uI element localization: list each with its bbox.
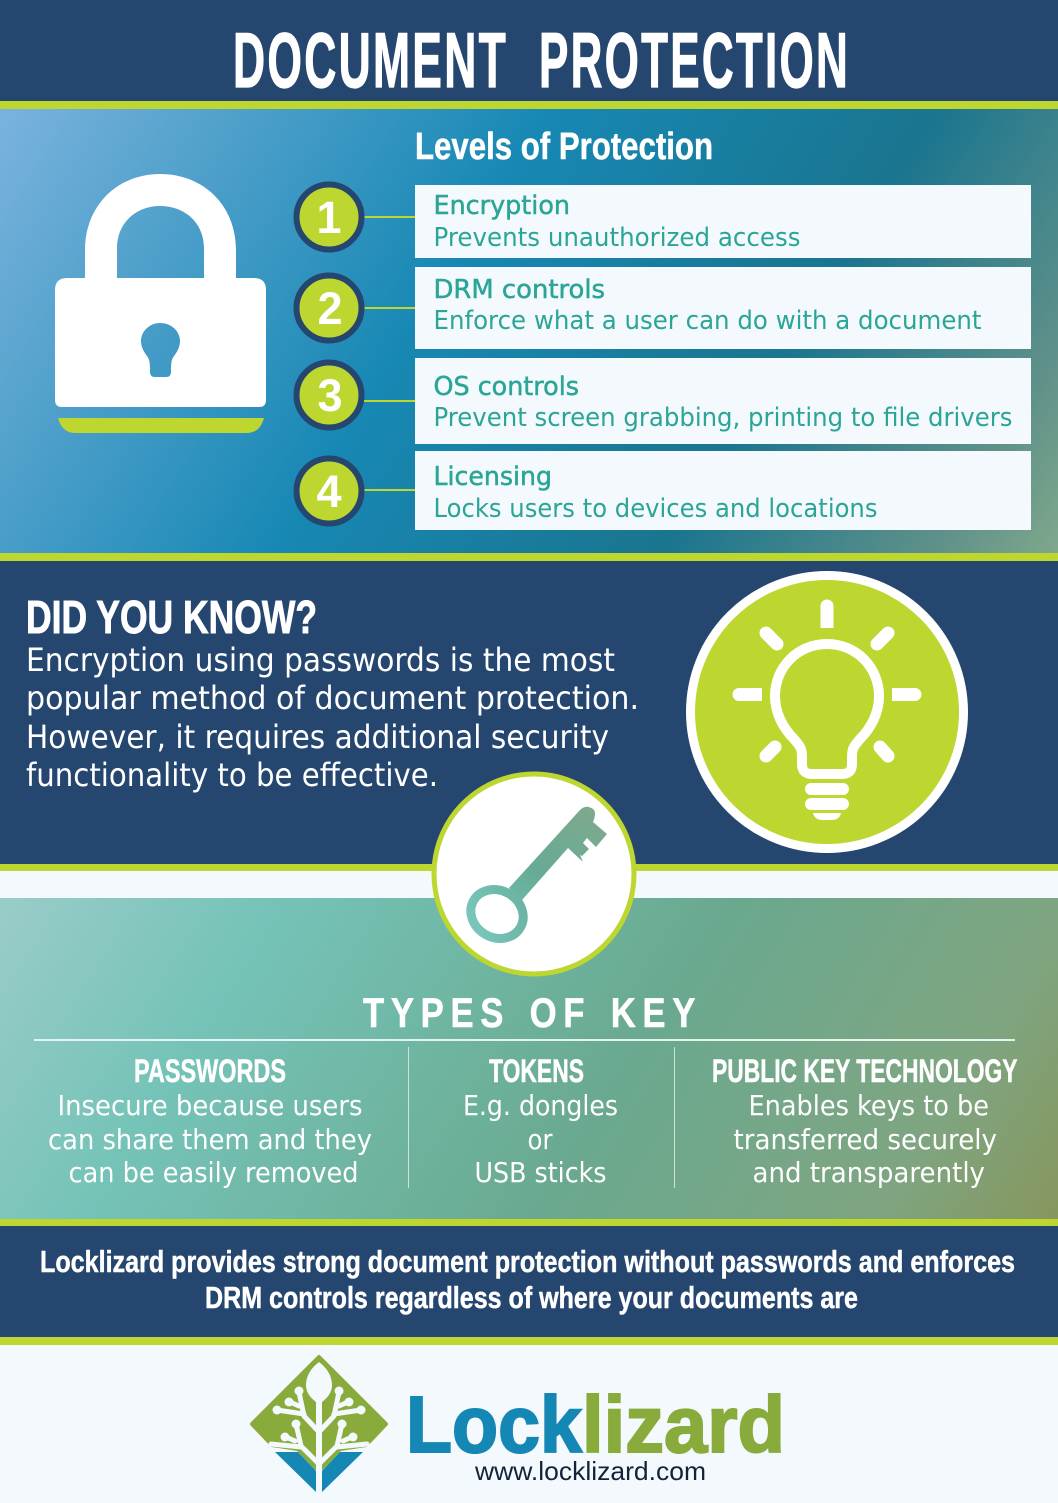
level 3: os controls — [296, 358, 1031, 444]
column: public key technology — [712, 1053, 1018, 1189]
logo: locklizard — [252, 1357, 785, 1492]
column: tokens — [463, 1053, 618, 1189]
website url: www.locklizard.com — [474, 1456, 706, 1486]
heading: types of key: TYPES OF KEY — [363, 989, 702, 1036]
wordmark — [406, 1380, 785, 1469]
heading: levels of protection: Levels of Protection — [415, 126, 713, 168]
wordmark: Lock — [406, 1380, 582, 1469]
level 2: drm controls: 2 — [317, 283, 343, 334]
level 3: os controls: OS controls — [434, 372, 579, 402]
panel: types of key — [0, 898, 1058, 1219]
level 1: encryption: Encryption — [434, 191, 570, 221]
level 1: encryption: 1 — [316, 192, 342, 243]
text block: encryption fact: However, it requires additional security — [26, 718, 609, 756]
level 1: encryption: Prevents unauthorized access — [434, 223, 800, 253]
level 1: encryption — [296, 184, 1031, 258]
column: public key technology: and transparently — [752, 1156, 985, 1189]
level 2: drm controls — [296, 267, 1031, 349]
level 2: drm controls: DRM controls — [434, 275, 605, 305]
wordmark: lizard — [582, 1380, 785, 1469]
icon: light bulb — [690, 576, 964, 848]
icon: key — [434, 774, 634, 974]
level 3: os controls: Prevent screen grabbing, printing to file drivers — [434, 403, 1012, 433]
column: passwords: PASSWORDS — [134, 1053, 286, 1089]
heading: did you know: DID YOU KNOW? — [26, 591, 317, 643]
level 4: licensing: Licensing — [434, 462, 552, 492]
column: tokens: TOKENS — [489, 1053, 584, 1089]
level 4: licensing — [296, 451, 1031, 530]
panel: locklizard statement: DRM controls regardless of where your documents are — [205, 1280, 858, 1315]
panel: locklizard statement — [0, 1226, 1058, 1337]
title banner: DOCUMENT — [233, 16, 508, 104]
level 2: drm controls: Enforce what a user can do with a document — [434, 306, 982, 336]
panel: did you know — [0, 561, 1058, 864]
column: public key technology: Enables keys to be — [748, 1089, 989, 1122]
level 4: licensing: Locks users to devices and locations — [434, 494, 878, 524]
column: tokens: USB sticks — [474, 1156, 606, 1189]
panel: levels of protection — [0, 109, 1058, 553]
column: public key technology: transferred securely — [734, 1123, 997, 1156]
column: passwords: can be easily removed — [68, 1156, 358, 1189]
level 3: os controls: 3 — [317, 370, 343, 421]
text block: encryption fact — [26, 641, 639, 794]
text block: encryption fact: functionality to be effective. — [26, 756, 438, 794]
column: passwords: Insecure because users — [58, 1089, 362, 1122]
level 4: licensing: 4 — [316, 466, 342, 517]
text block: encryption fact: Encryption using passwords is the most — [26, 641, 615, 679]
icon: tree diamond — [252, 1357, 386, 1492]
column: passwords: can share them and they — [48, 1123, 372, 1156]
column: tokens: E.g. dongles — [463, 1089, 618, 1122]
icon: padlock — [55, 174, 266, 433]
column: tokens: or — [528, 1123, 553, 1156]
text block: encryption fact: popular method of document protection. — [26, 679, 639, 717]
column: passwords — [48, 1053, 372, 1189]
title banner — [0, 0, 1058, 104]
